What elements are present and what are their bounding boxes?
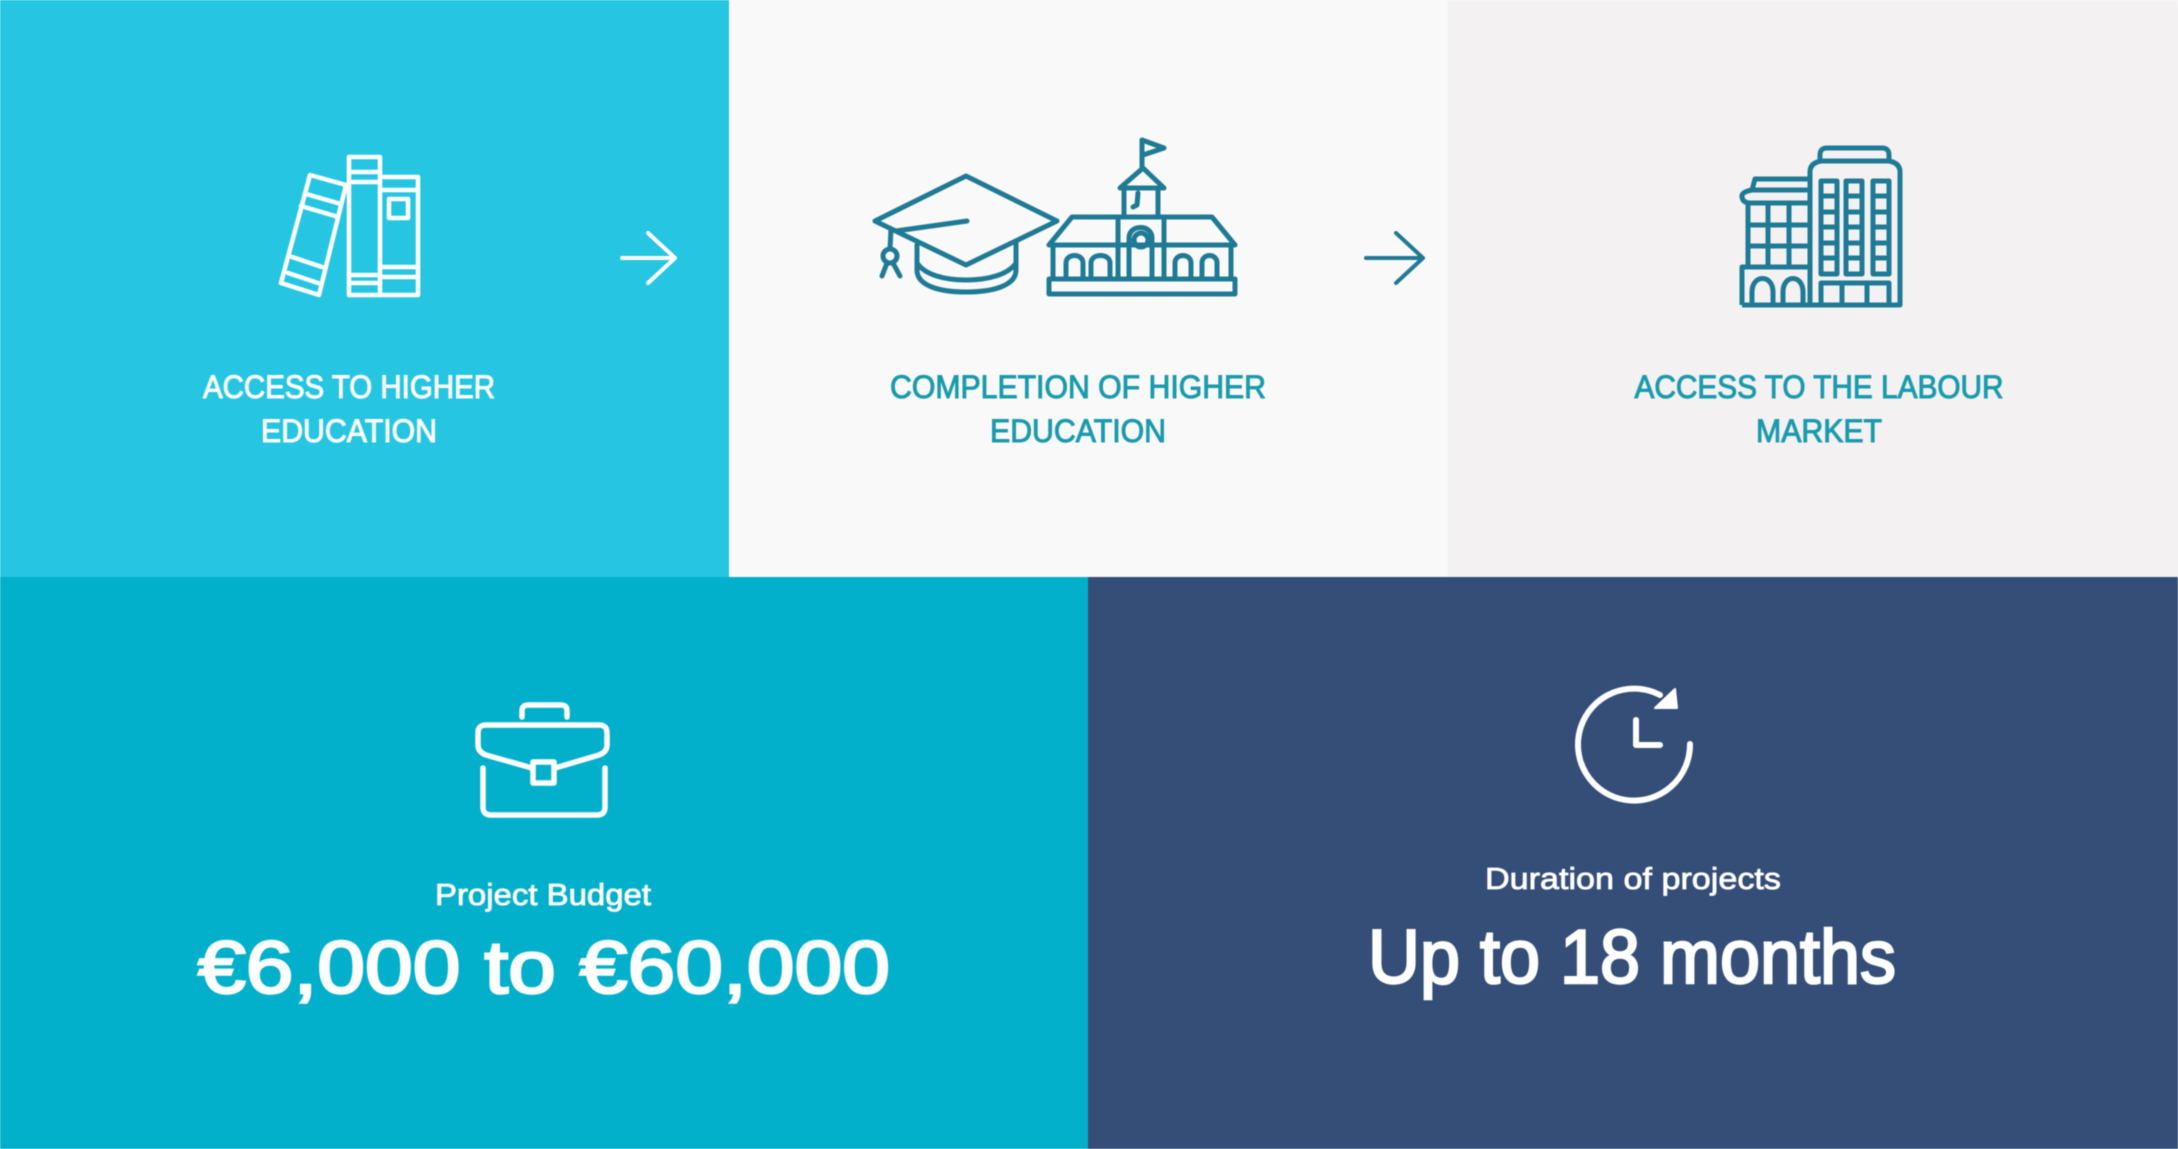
- panel background: light grey: [1448, 0, 2178, 577]
- icon: university building: [1049, 140, 1235, 294]
- icon: books: [281, 157, 418, 295]
- icon: graduation cap: [875, 176, 1057, 292]
- panel: duration of projects: [1088, 577, 2178, 1149]
- heading: access to the labour market: MARKET: [1756, 413, 1882, 449]
- panel background: off-white: [729, 0, 1448, 577]
- heading: completion of higher education: COMPLETION OF HIGHER: [890, 369, 1266, 405]
- panel: access to the labour market: [1448, 0, 2178, 577]
- icon: briefcase: [478, 705, 607, 815]
- arrow: to completion: [622, 233, 675, 283]
- heading: access to the labour market: ACCESS TO THE LABOUR: [1634, 369, 2004, 405]
- panel background: cyan: [0, 0, 729, 577]
- label: duration of projects: Duration of projects: [1485, 861, 1781, 896]
- heading: access to higher education: ACCESS TO HIGHER: [203, 369, 495, 405]
- panel background: navy: [1088, 577, 2178, 1149]
- panel: project budget: [0, 577, 1088, 1149]
- icon: clock with arrow: [1578, 689, 1690, 801]
- arrow: to labour market: [1366, 233, 1423, 283]
- heading: completion of higher education: EDUCATION: [990, 413, 1166, 449]
- icon: office buildings: [1742, 148, 1900, 305]
- panel: completion of higher education: [729, 0, 1448, 577]
- value: up to 18 months: Up to 18 months: [1368, 915, 1896, 1000]
- value: budget range: €6,000 to €60,000: [198, 926, 890, 1009]
- label: project budget: Project Budget: [435, 877, 651, 912]
- panel: access to higher education: [0, 0, 729, 577]
- heading: access to higher education: EDUCATION: [261, 413, 437, 449]
- panel background: teal: [0, 577, 1088, 1149]
